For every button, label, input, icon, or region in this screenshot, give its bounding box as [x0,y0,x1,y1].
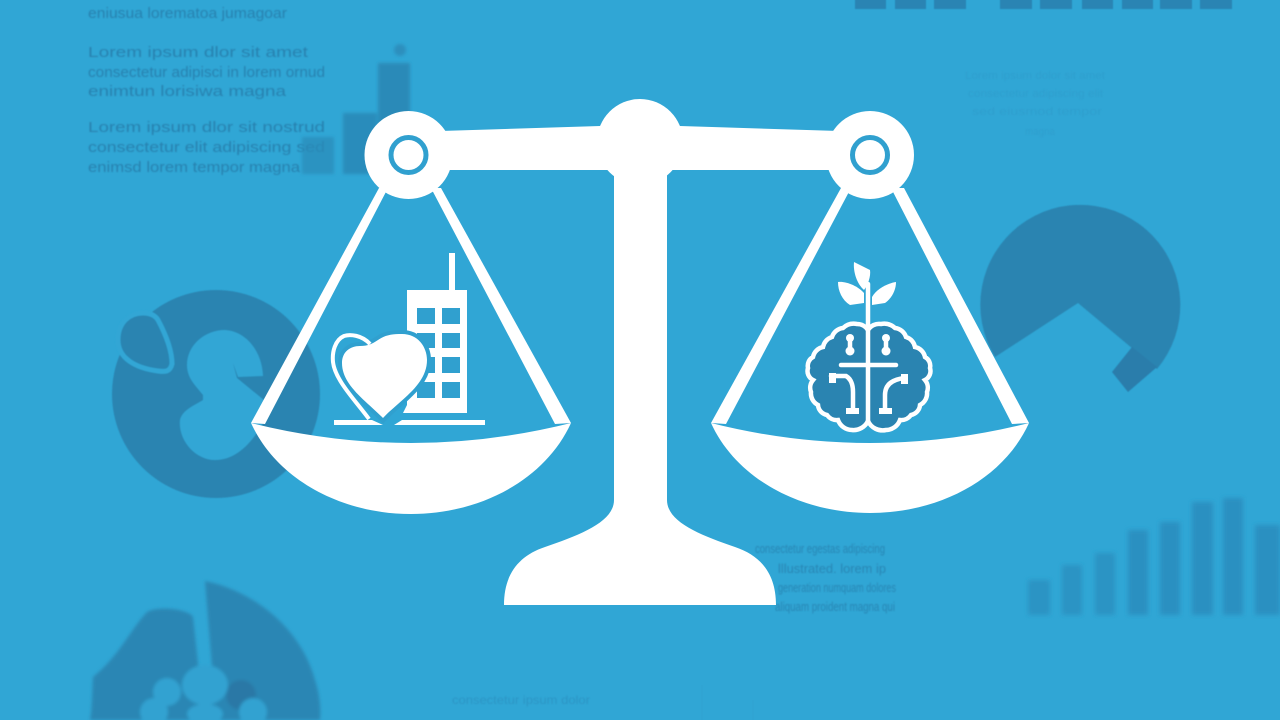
text block: faint upper right: sed eiusmod tempor [972,106,1102,118]
heart gap [342,334,427,418]
right pivot [826,111,914,199]
text block: bottom faint: consectetur ipsum dolor [452,693,590,707]
text block: top left paragraphs [88,5,325,176]
right chains [711,188,1029,424]
text block: faint upper right: magna [1025,126,1056,138]
donut ring [112,290,320,498]
circuit nodes [829,334,908,414]
left pan [251,423,571,514]
right pan [711,423,1029,513]
text block: top left paragraphs: Lorem ipsum dlor sit nostrud [88,119,325,136]
lungs illustration: bottom left background [90,581,320,720]
text block: top left paragraphs: enimsd lorem tempor magna [88,159,301,176]
balance scale [251,99,1029,605]
beam centre cap [597,99,683,185]
text block: bottom centre: consectetur egestas adipiscing [755,541,885,556]
icon: heart and hospital building [333,253,485,425]
text block: bottom centre: aliquam proident magna qui [775,599,895,614]
brain outline [808,324,930,430]
text block: faint upper right [965,70,1105,138]
text block: faint upper right: Lorem ipsum dolor sit amet [965,70,1105,82]
teardrop segment [118,313,172,371]
base line [334,420,485,425]
icon: brain with sprout [808,262,930,430]
pie offset tile [1112,347,1157,392]
donut chart: left background [112,290,320,498]
pie sector [980,205,1180,369]
bar chart: bottom right background [1028,498,1280,615]
building [403,253,467,413]
squares row: top right [855,0,1232,9]
light nodes [140,665,267,720]
text block: top left paragraphs: consectetur elit adipiscing sed [88,139,325,156]
sprout leaves [838,262,896,305]
pie chart: right background [980,205,1180,392]
solid heart [342,334,427,418]
text block: top left paragraphs: Lorem ipsum dlor sit amet [88,44,309,61]
dollar shaped centre [180,330,270,460]
text block: top left paragraphs: eniusua lorematoa jumagoar [88,5,287,22]
text block: bottom centre: generation numquam dolores [778,580,896,595]
left chains [251,188,571,424]
stem and circuit lines [831,284,905,421]
text block: bottom centre: lllustrated. lorem ip [778,561,886,576]
bar chart: top left background [302,44,410,174]
scale base and column [504,170,776,605]
text block: bottom centre [755,541,896,614]
dark node [226,680,256,710]
right lung [200,581,320,720]
left pivot [364,111,452,199]
heart outline [333,335,370,419]
text block: top left paragraphs: consectetur adipisci in lorem ornud [88,64,325,81]
text block: faint upper right: consectetur adipiscing elit [968,88,1103,100]
left lung [90,609,200,720]
scale beam [408,126,872,170]
text block: top left paragraphs: enimtun lorisiwa magna [88,83,287,100]
